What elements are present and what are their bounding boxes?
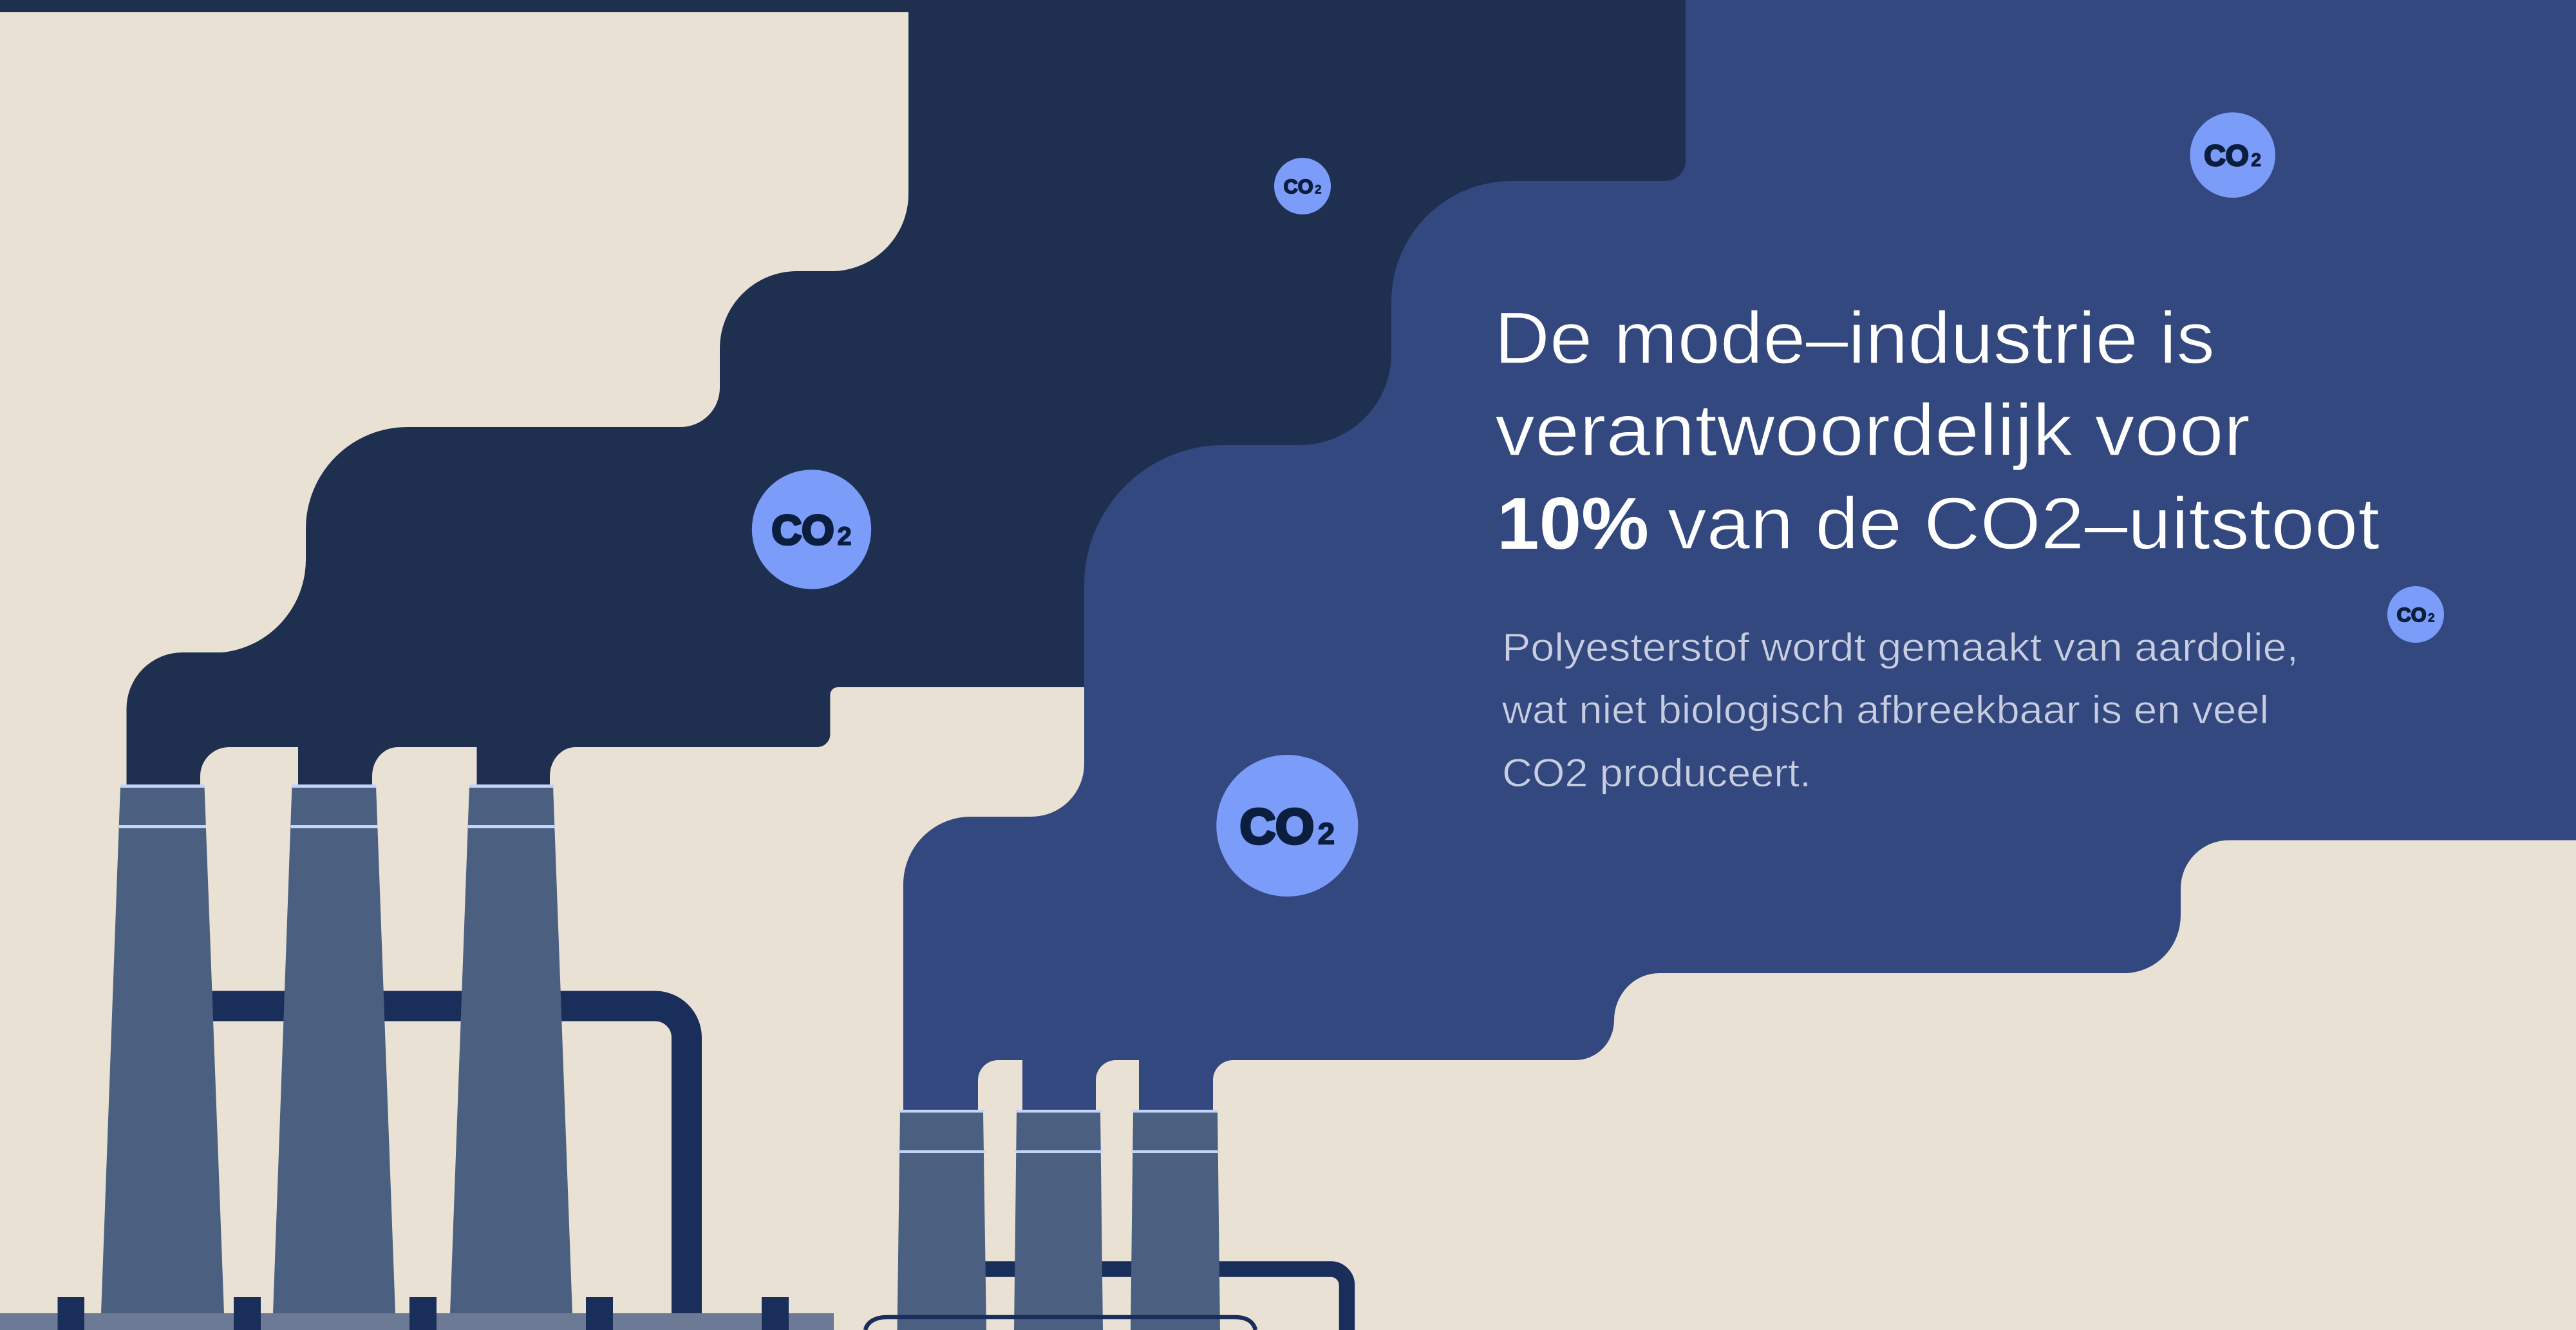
CO2 badge: small, dark cloud: CO <box>1284 176 1313 198</box>
heading: De mode–industrie is <box>1494 298 2215 379</box>
CO2 badge: medium, dark cloud: 2 <box>837 522 852 551</box>
body text <box>1501 625 2299 795</box>
CO2 badge: right small: 2 <box>2428 611 2435 625</box>
base posts <box>58 1297 789 1330</box>
heading: van de CO2–uitstoot <box>1668 483 2380 565</box>
CO2 badge: medium, dark cloud: CO <box>771 507 834 553</box>
tank outline <box>865 1317 1255 1330</box>
chimney 1 <box>101 784 224 1313</box>
heading: verantwoordelijk voor <box>1495 390 2250 471</box>
heading: 10% <box>1497 483 1649 565</box>
chimney C <box>1131 1110 1220 1330</box>
body text: wat niet biologisch afbreekbaar is en veel <box>1501 688 2269 732</box>
chimney B <box>1014 1110 1103 1330</box>
dark smoke cloud <box>0 0 1738 786</box>
right factory chimneys <box>898 1110 1220 1330</box>
left factory base <box>0 1313 834 1330</box>
CO2 badge: small, dark cloud: 2 <box>1315 183 1322 196</box>
left factory chimneys <box>101 784 572 1313</box>
CO2 badge: small, dark cloud <box>1274 158 1331 214</box>
heading <box>1494 298 2380 565</box>
CO2 badge: right small <box>2387 586 2444 643</box>
pipe: left factory <box>193 1006 687 1317</box>
pipe: right factory <box>966 1269 1347 1330</box>
chimney 2 <box>273 784 395 1313</box>
CO2 badge: medium, dark cloud <box>752 470 871 589</box>
CO2 badge: right small: CO <box>2397 604 2427 626</box>
CO2 badge: top right <box>2190 112 2275 198</box>
chimney A <box>898 1110 986 1330</box>
CO2 badge: large, blue cloud <box>1216 755 1358 897</box>
blue smoke cloud <box>903 0 2576 1111</box>
body text: CO2 produceert. <box>1502 751 1811 795</box>
CO2 badge: large, blue cloud: CO <box>1240 799 1314 854</box>
CO2 badge: top right: CO <box>2204 139 2249 172</box>
CO2 badge: large, blue cloud: 2 <box>1318 817 1335 851</box>
CO2 badge: top right: 2 <box>2251 150 2261 171</box>
chimney 3 <box>450 784 572 1313</box>
body text: Polyesterstof wordt gemaakt van aardolie, <box>1502 625 2299 669</box>
